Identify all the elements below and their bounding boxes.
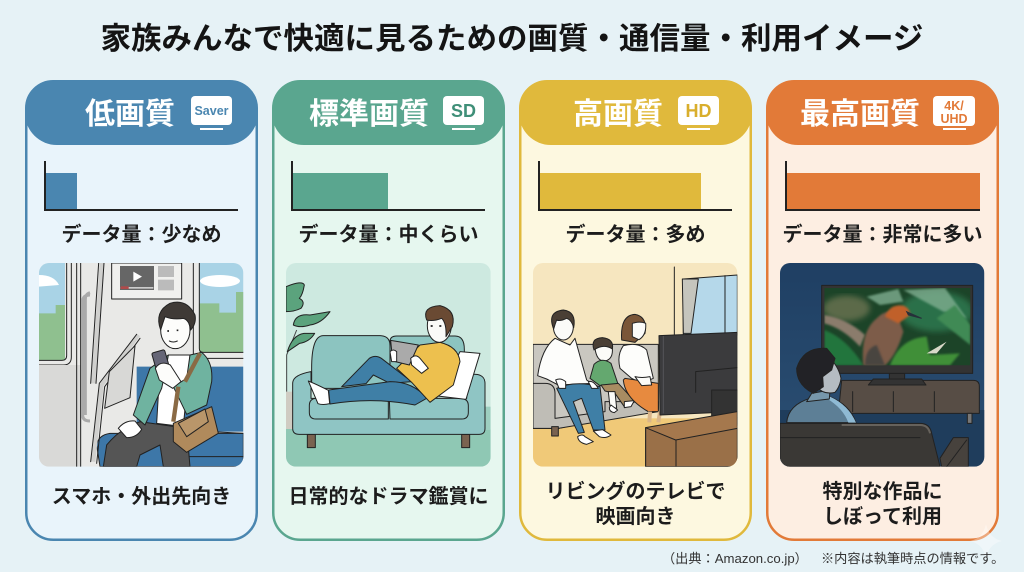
header: low quality: 低画質 [85,98,175,131]
panel: highest quality: しぼって利用 [823,505,942,528]
badge: SD: SD [451,101,476,121]
data label: highest: データ量：非常に多い [782,222,982,246]
header: high quality [519,80,752,145]
illustration: man on sofa with tablet [286,263,491,467]
panel: standard quality [272,80,505,540]
badge: 4K/UHD: 4K/ [944,99,964,113]
footer: source note: （出典：Amazon.co.jp） [662,551,808,566]
badge: Saver [191,96,232,130]
bar chart: high data [539,161,732,210]
illustration: man with smartphone on train [39,263,243,467]
footer: disclaimer: ※内容は執筆時点の情報です。 [821,550,1004,566]
panel: high quality: 映画向き [596,505,676,528]
data label: low: データ量：少なめ [62,222,222,246]
header: highest quality: 最高画質 [800,98,920,131]
bar chart: highest data [786,161,980,210]
badge: Saver: Saver [194,104,229,118]
header: standard quality [272,80,505,145]
watermark sparkle [970,524,1002,558]
bar chart: medium data [292,161,485,210]
badge: HD: HD [686,101,712,121]
panel: low quality [25,80,258,540]
badge: HD [678,96,719,130]
panel: highest quality [766,80,999,540]
data label: high: データ量：多め [566,222,706,246]
illustration: family watching TV [533,263,738,467]
header: high quality: 高画質 [573,98,663,131]
panel: high quality [519,80,752,540]
caption: highest: 特別な作品に [822,480,942,503]
header: highest quality [766,80,999,145]
badge: 4K/UHD [933,96,975,130]
caption: medium: 日常的なドラマ鑑賞に [288,485,488,508]
caption: low: スマホ・外出先向き [52,485,231,508]
header: standard quality: 標準画質 [309,98,429,131]
badge: SD [443,96,484,130]
header: low quality [25,80,258,145]
title: 家族みんなで快適に見るための画質・通信量・利用イメージ [101,22,923,56]
badge: 4K/UHD: UHD [940,112,968,126]
bar chart: low data [45,161,238,210]
data label: medium: データ量：中くらい [298,222,478,246]
caption: high: リビングのテレビで [546,479,726,503]
illustration: person watching nature film on large TV [780,263,984,467]
